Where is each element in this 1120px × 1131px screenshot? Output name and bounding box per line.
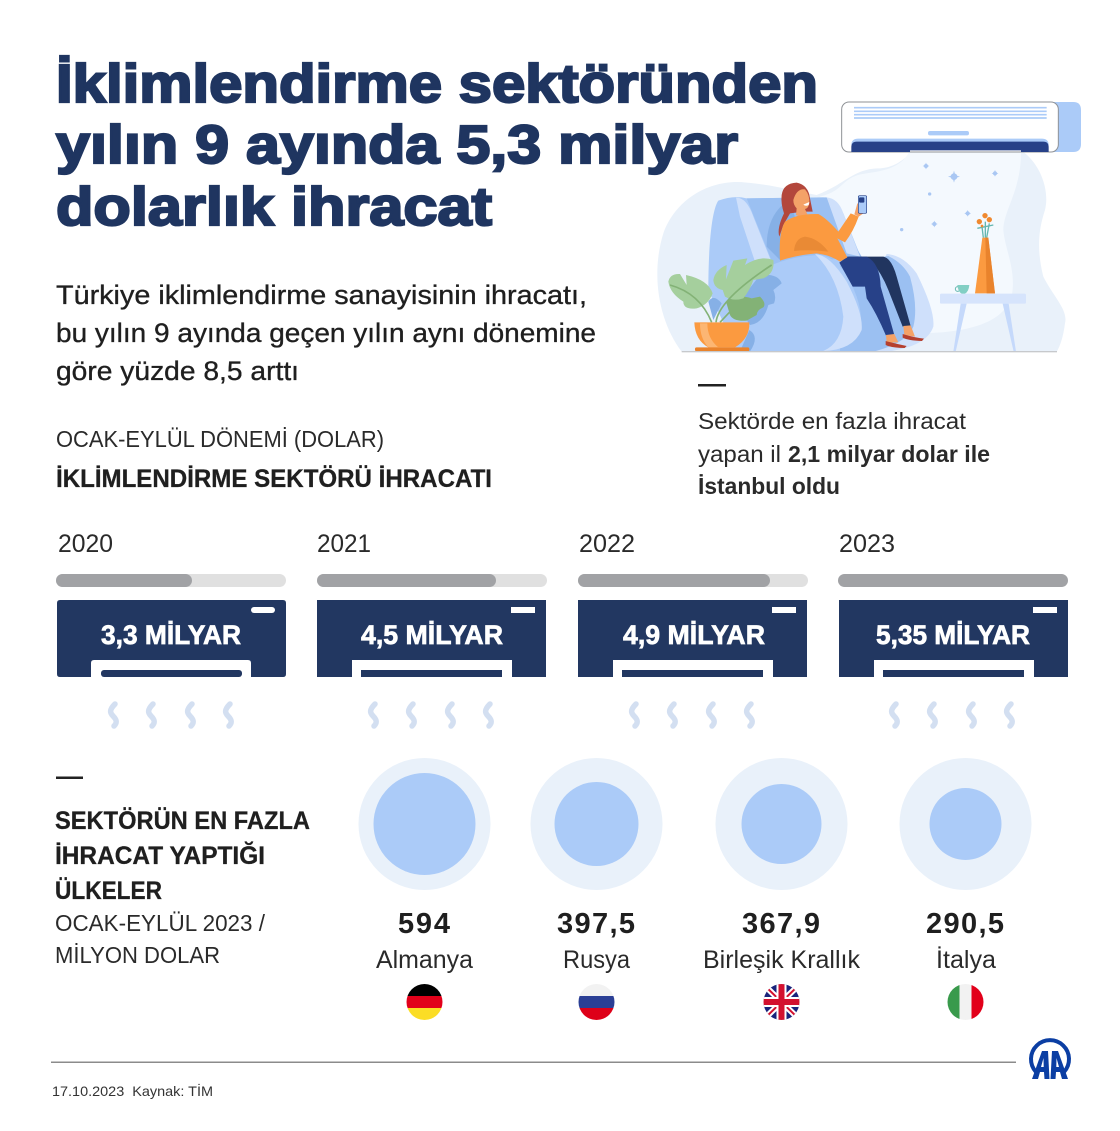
year column 2022 — [578, 530, 808, 726]
source line: 17.10.2023 Kaynak: TİM — [52, 1082, 213, 1099]
potted plant — [668, 258, 782, 351]
year column 2022: 4,9 MİLYAR — [623, 620, 765, 650]
country: Russia — [530, 758, 662, 1020]
year column 2021: 2021 — [317, 530, 371, 558]
air flow area — [820, 151, 1021, 333]
country: Russia: 397,5 — [557, 908, 635, 940]
section heading: top export countries: İHRACAT YAPTIĞI — [55, 841, 265, 870]
background blob — [657, 151, 1065, 352]
callout: Istanbul: yapan il — [698, 441, 781, 467]
vase with flowers — [975, 213, 995, 293]
intro paragraph: göre yüzde 8,5 arttı — [56, 356, 299, 386]
title — [56, 54, 818, 237]
country: Germany: 594 — [398, 908, 450, 940]
year column 2023 — [838, 530, 1068, 726]
section heading: top export countries — [55, 776, 310, 968]
cold air stars — [900, 163, 998, 231]
section heading: exports: OCAK-EYLÜL DÖNEMİ (DOLAR) — [56, 426, 384, 452]
callout: Istanbul: Sektörde en fazla ihracat — [698, 408, 967, 434]
year column 2022: 2022 — [579, 530, 635, 558]
year column 2020: 2020 — [58, 530, 113, 558]
section heading: top export countries: OCAK-EYLÜL 2023 / — [55, 910, 266, 936]
country: Germany — [358, 758, 490, 1020]
section heading: top export countries: SEKTÖRÜN EN FAZLA — [55, 806, 310, 835]
country: Italy: İtalya — [936, 945, 996, 974]
country: Germany: Almanya — [376, 946, 473, 974]
intro paragraph — [56, 280, 596, 386]
year column 2023: 2023 — [839, 530, 895, 558]
section heading: exports: İKLİMLENDİRME SEKTÖRÜ İHRACATI — [56, 464, 492, 493]
country: United Kingdom — [703, 758, 860, 1020]
country: Italy: 290,5 — [926, 908, 1004, 940]
section heading: exports — [56, 426, 492, 493]
armchair — [708, 197, 933, 352]
section heading: top export countries: MİLYON DOLAR — [55, 942, 220, 968]
section heading: top export countries: ÜLKELER — [55, 876, 162, 905]
year column 2023: 5,35 MİLYAR — [876, 620, 1030, 650]
country: United Kingdom: Birleşik Krallık — [703, 946, 860, 974]
year column 2021: 4,5 MİLYAR — [361, 620, 503, 650]
title: İklimlendirme sektöründen — [56, 54, 818, 114]
air conditioner unit — [842, 102, 1081, 152]
title: dolarlık ihracat — [56, 177, 492, 237]
country: Russia: Rusya — [563, 946, 630, 974]
country: Italy — [900, 758, 1032, 1020]
illustration: woman cooled by air conditioner — [657, 102, 1081, 352]
callout: Istanbul: 2,1 milyar dolar ile — [788, 441, 990, 467]
year column 2020 — [56, 530, 286, 726]
callout: Istanbul — [698, 384, 990, 499]
intro paragraph: bu yılın 9 ayında geçen yılın aynı dönemine — [56, 318, 596, 348]
year column 2021 — [317, 530, 547, 726]
logo: AA — [1031, 1040, 1069, 1079]
woman — [779, 183, 924, 348]
country: United Kingdom: 367,9 — [742, 908, 820, 940]
intro paragraph: Türkiye iklimlendirme sanayisinin ihracatı, — [56, 280, 587, 310]
side table — [940, 294, 1026, 352]
callout: Istanbul: İstanbul oldu — [698, 473, 840, 499]
year column 2020: 3,3 MİLYAR — [101, 620, 241, 650]
cup — [955, 285, 969, 294]
title: yılın 9 ayında 5,3 milyar — [56, 115, 738, 175]
